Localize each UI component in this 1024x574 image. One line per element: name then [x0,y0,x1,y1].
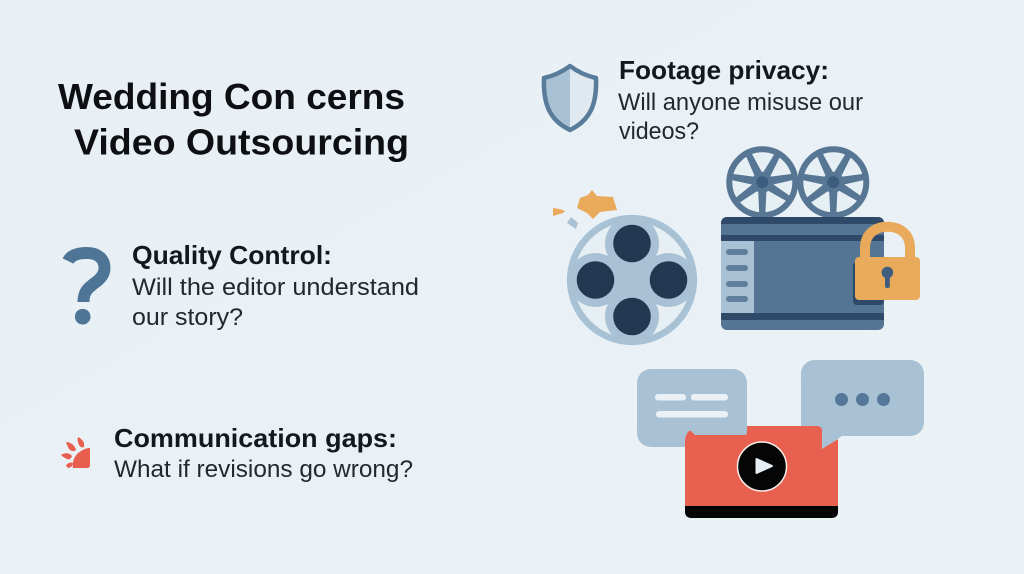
icon: right speech bubble [801,360,924,450]
text block: footage privacy [618,55,863,145]
title: Wedding Con cerns [58,76,405,117]
text block: quality control: Quality Control: [132,240,332,270]
icon: video player [685,426,838,518]
icon: shield [544,66,596,130]
play button [738,442,786,491]
icon: film reel [568,216,696,344]
text block: quality control: Will the editor understand [132,274,419,301]
icon: film fragments [553,190,617,229]
icon: question mark [68,253,104,325]
title: Video Outsourcing [74,122,409,162]
icon: padlock [853,227,920,305]
icon: projector body [721,217,884,330]
text block: footage privacy: videos? [619,118,699,145]
text block: communication gaps: Communication gaps: [114,423,397,453]
text block: communication gaps [114,423,413,483]
text block: quality control [132,240,419,331]
text block: communication gaps: What if revisions go wrong? [114,456,413,483]
right projector reel [800,149,867,215]
icon: projector reels [729,149,867,215]
left projector reel [729,149,796,215]
text block: footage privacy: Footage privacy: [619,55,829,85]
icon: communication spark [61,437,90,468]
title [58,76,409,162]
text block: quality control: our story? [132,304,243,331]
text block: footage privacy: Will anyone misuse our [618,89,863,116]
icon: left speech bubble [637,369,747,447]
